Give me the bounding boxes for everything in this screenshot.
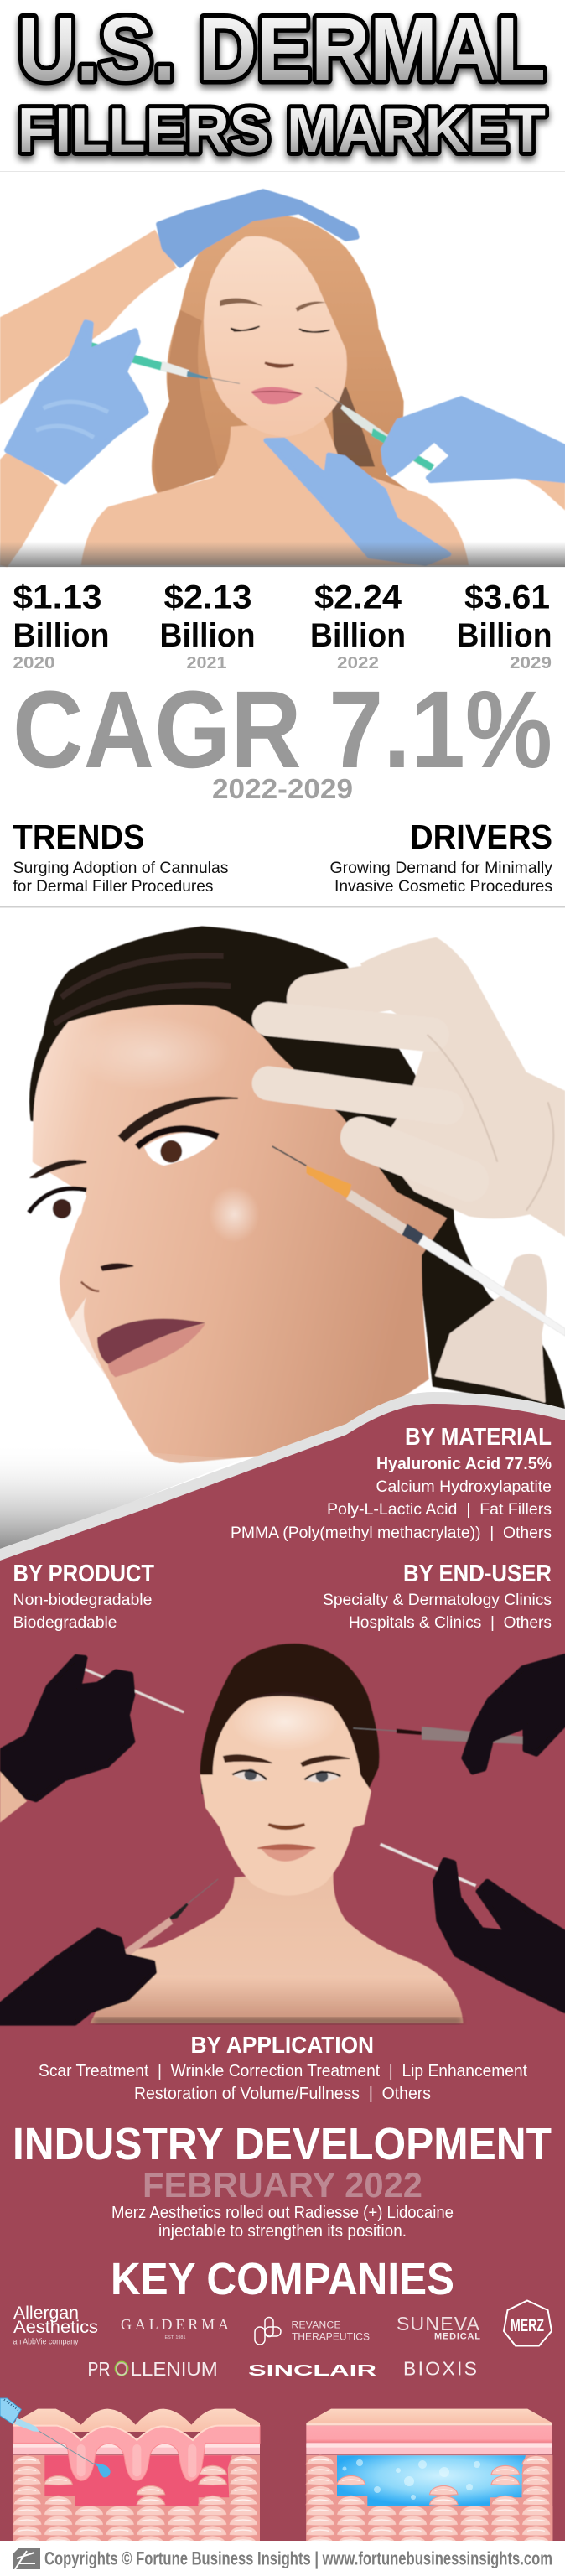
logo: Sinclair: SINCLAIR <box>248 2361 376 2379</box>
syringe and drop <box>0 2398 111 2477</box>
logo: Merz: MERZ <box>511 2316 544 2335</box>
logo: Prollenium <box>87 2358 218 2380</box>
trends: for Dermal Filler Procedures <box>13 878 213 896</box>
logo: Allergan Aesthetics: Allergan <box>13 2303 79 2323</box>
by application: BY APPLICATION <box>191 2032 374 2058</box>
key companies heading: KEY COMPANIES <box>111 2254 454 2304</box>
stat 2029: 2029 <box>510 654 552 673</box>
logo: Galderma <box>121 2316 229 2340</box>
skin layers <box>13 2409 260 2481</box>
market values <box>13 579 552 673</box>
industry development: FEBRUARY 2022 <box>143 2165 422 2205</box>
stat 2021: 2021 <box>186 654 226 673</box>
fat layer <box>306 2455 552 2541</box>
logo: Allergan Aesthetics <box>13 2303 98 2346</box>
logo: Allergan Aesthetics: Aesthetics <box>13 2318 98 2337</box>
footer logo <box>13 2548 40 2569</box>
illustration: untreated skin with wrinkles and syringe <box>0 2398 260 2541</box>
trends <box>13 818 228 896</box>
stat 2029: Billion <box>456 617 552 654</box>
logo: Prollenium: PR <box>87 2358 111 2380</box>
by material: Calcium Hydroxylapatite <box>376 1478 552 1496</box>
blue filler <box>337 2455 526 2506</box>
fat layer <box>13 2455 260 2541</box>
stat 2020 <box>13 579 109 673</box>
stat 2022: Billion <box>310 617 406 654</box>
logo: Galderma: GALDERMA <box>121 2316 229 2333</box>
fat cells <box>306 2455 552 2541</box>
photo: woman with dark hair and syringe <box>29 926 565 1463</box>
by application <box>39 2032 527 2103</box>
logo: Galderma: EST. 1981 <box>164 2335 186 2340</box>
logo: Suneva Medical: MEDICAL <box>434 2331 480 2341</box>
logo: Revance Therapeutics <box>255 2318 370 2345</box>
stat 2020: $1.13 <box>13 579 102 615</box>
by material: Poly-L-Lactic Acid | Fat Fillers <box>327 1501 552 1519</box>
title <box>18 0 546 165</box>
trends: TRENDS <box>13 818 144 856</box>
logo: Revance Therapeutics: REVANCE <box>292 2319 340 2331</box>
trends: Surging Adoption of Cannulas <box>13 860 228 877</box>
shadow under face <box>0 1442 243 1549</box>
stat 2029: $3.61 <box>464 579 550 615</box>
illustration: treated skin with blue filler <box>306 2409 552 2541</box>
curved maroon panel <box>0 1392 565 2576</box>
by end-user <box>323 1561 552 1632</box>
stat 2021: Billion <box>159 617 255 654</box>
drivers <box>330 818 553 896</box>
stat 2021 <box>159 579 255 673</box>
by product <box>13 1561 154 1632</box>
logo: Prollenium: LLENIUM <box>131 2358 218 2380</box>
by end-user: Hospitals & Clinics | Others <box>349 1614 552 1632</box>
drivers: Invasive Cosmetic Procedures <box>334 878 552 896</box>
stat 2029 <box>456 579 552 673</box>
stat 2020: 2020 <box>13 654 55 673</box>
stat 2022: $2.24 <box>314 579 402 615</box>
by end-user: Specialty & Dermatology Clinics <box>323 1592 552 1609</box>
footer bar <box>0 2541 565 2576</box>
drivers: DRIVERS <box>410 818 552 856</box>
photo: woman with blue gloves and syringes <box>0 191 565 567</box>
fat cells <box>13 2455 260 2541</box>
logo: Revance Therapeutics: THERAPEUTICS <box>292 2331 370 2343</box>
by material: Hyaluronic Acid 77.5% <box>376 1455 552 1473</box>
by product: BY PRODUCT <box>13 1561 154 1587</box>
photo: woman with black gloves and syringes <box>0 1644 565 2023</box>
title: FILLERS MARKET <box>18 95 546 165</box>
dermal void <box>44 2455 232 2506</box>
by material: PMMA (Poly(methyl methacrylate)) | Others <box>231 1524 552 1542</box>
logo: Allergan Aesthetics: an AbbVie company <box>13 2338 79 2346</box>
by application: Restoration of Volume/Fullness | Others <box>134 2085 431 2103</box>
logo: Merz <box>504 2301 552 2346</box>
by product: Biodegradable <box>13 1614 117 1632</box>
industry development <box>13 2119 552 2241</box>
skin layers <box>306 2409 552 2454</box>
stat 2022 <box>310 579 406 673</box>
by application: Scar Treatment | Wrinkle Correction Treatment | Lip Enhancement <box>39 2062 527 2080</box>
by material: BY MATERIAL <box>405 1424 552 1451</box>
stat 2021: $2.13 <box>164 579 251 615</box>
company logos <box>13 2301 552 2380</box>
CAGR: 2022-2029 <box>212 773 353 804</box>
stat 2022: 2022 <box>337 654 379 673</box>
industry development: injectable to strengthen its position. <box>158 2222 407 2241</box>
by product: Non-biodegradable <box>13 1592 153 1609</box>
logo: Suneva Medical: SUNEVA <box>397 2313 480 2334</box>
by material <box>231 1424 552 1542</box>
logo: Bioxis: BIOXIS <box>403 2358 477 2380</box>
logo: Prollenium: O <box>115 2358 128 2380</box>
drivers: Growing Demand for Minimally <box>330 860 553 877</box>
industry development: Merz Aesthetics rolled out Radiesse (+) Lidocaine <box>111 2204 454 2222</box>
stat 2020: Billion <box>13 617 109 654</box>
